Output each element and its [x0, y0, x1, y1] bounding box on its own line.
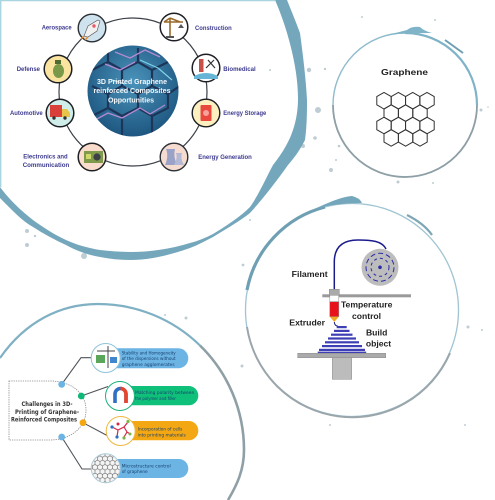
central image: graphene with title: reinforced Composites	[94, 88, 171, 95]
printer rail	[322, 294, 411, 297]
item: incorporation of cells: into printing materials	[138, 432, 186, 438]
callout: challenges title shape: Challenges in 3D-	[22, 401, 73, 408]
connector lines	[62, 358, 108, 469]
filament line	[334, 240, 386, 290]
item: Electronics and Communication: Communication	[23, 162, 69, 169]
item: Electronics and Communication: Electronics and	[23, 154, 68, 160]
item: Construction	[160, 13, 232, 41]
panel: challenges circle	[0, 304, 244, 500]
heading: Graphene: Graphene	[381, 67, 428, 77]
opportunities ring	[59, 18, 207, 166]
label: Build object: object	[366, 339, 391, 349]
splatter: paint specks	[25, 16, 489, 426]
label: Temperature control: control	[352, 311, 381, 321]
item: matching polarity	[106, 382, 198, 410]
item: Energy Storage: Energy Storage	[223, 110, 267, 117]
panel: graphene circle	[333, 27, 477, 177]
central image: graphene with title: Opportunities	[108, 98, 154, 104]
callout: challenges title shape: Reinforced Composites	[11, 416, 77, 424]
callout: challenges title shape	[9, 381, 86, 440]
item: Defense	[17, 55, 72, 83]
item: Energy Storage	[192, 99, 267, 127]
label: Build object: Build	[366, 328, 387, 338]
label: Temperature control: Temperature	[341, 300, 393, 310]
item: Defense: Defense	[17, 66, 40, 73]
label: Temperature control	[341, 300, 393, 321]
item: Construction: Construction	[195, 25, 232, 32]
item: stability and homogeneity: graphene agglomerates	[122, 362, 175, 368]
item: microstructure control	[91, 454, 188, 483]
item: Automotive	[10, 99, 74, 127]
extruder	[329, 289, 339, 326]
label: Extruder: Extruder	[289, 318, 326, 328]
item: microstructure control: of graphene	[122, 469, 148, 475]
item: matching polarity: Matching polarity between	[135, 390, 194, 396]
build plate and stand	[298, 353, 386, 379]
item: stability and homogeneity: of the dispersions without	[122, 356, 176, 362]
item: Aerospace: Aerospace	[42, 25, 72, 32]
item: Energy Generation: Energy Generation	[198, 154, 252, 161]
build object	[318, 326, 366, 353]
connector nodes	[58, 381, 86, 440]
item: Electronics and Communication	[23, 143, 106, 171]
item: Biomedical	[192, 54, 256, 82]
item: Aerospace	[42, 14, 106, 42]
callout: challenges title shape: Printing of Graphene-	[15, 409, 79, 416]
label: Build object	[366, 328, 391, 349]
item: Energy Generation	[160, 143, 252, 171]
item: Automotive: Automotive	[10, 110, 43, 117]
item: incorporation of cells: Incorporation of cells	[138, 426, 183, 432]
icon: graphene lattice	[377, 92, 434, 146]
item: Biomedical: Biomedical	[223, 66, 256, 73]
item: incorporation of cells	[106, 416, 198, 446]
item: stability and homogeneity: Stability and Homogeneity	[122, 350, 176, 356]
item: microstructure control: Microstructure control	[122, 463, 171, 469]
label: Filament: Filament	[292, 269, 328, 279]
panel: frame of opportunities panel	[0, 0, 275, 187]
item: matching polarity: the polymer and filler	[135, 396, 176, 402]
item: stability and homogeneity	[91, 344, 188, 372]
panel band: opportunities circle rim	[0, 0, 307, 260]
icon: filament spool	[362, 249, 398, 286]
central image: graphene with title	[88, 46, 180, 136]
panel: 3D printer circle	[246, 196, 458, 417]
central image: graphene with title: 3D Printed Graphene	[97, 79, 167, 86]
